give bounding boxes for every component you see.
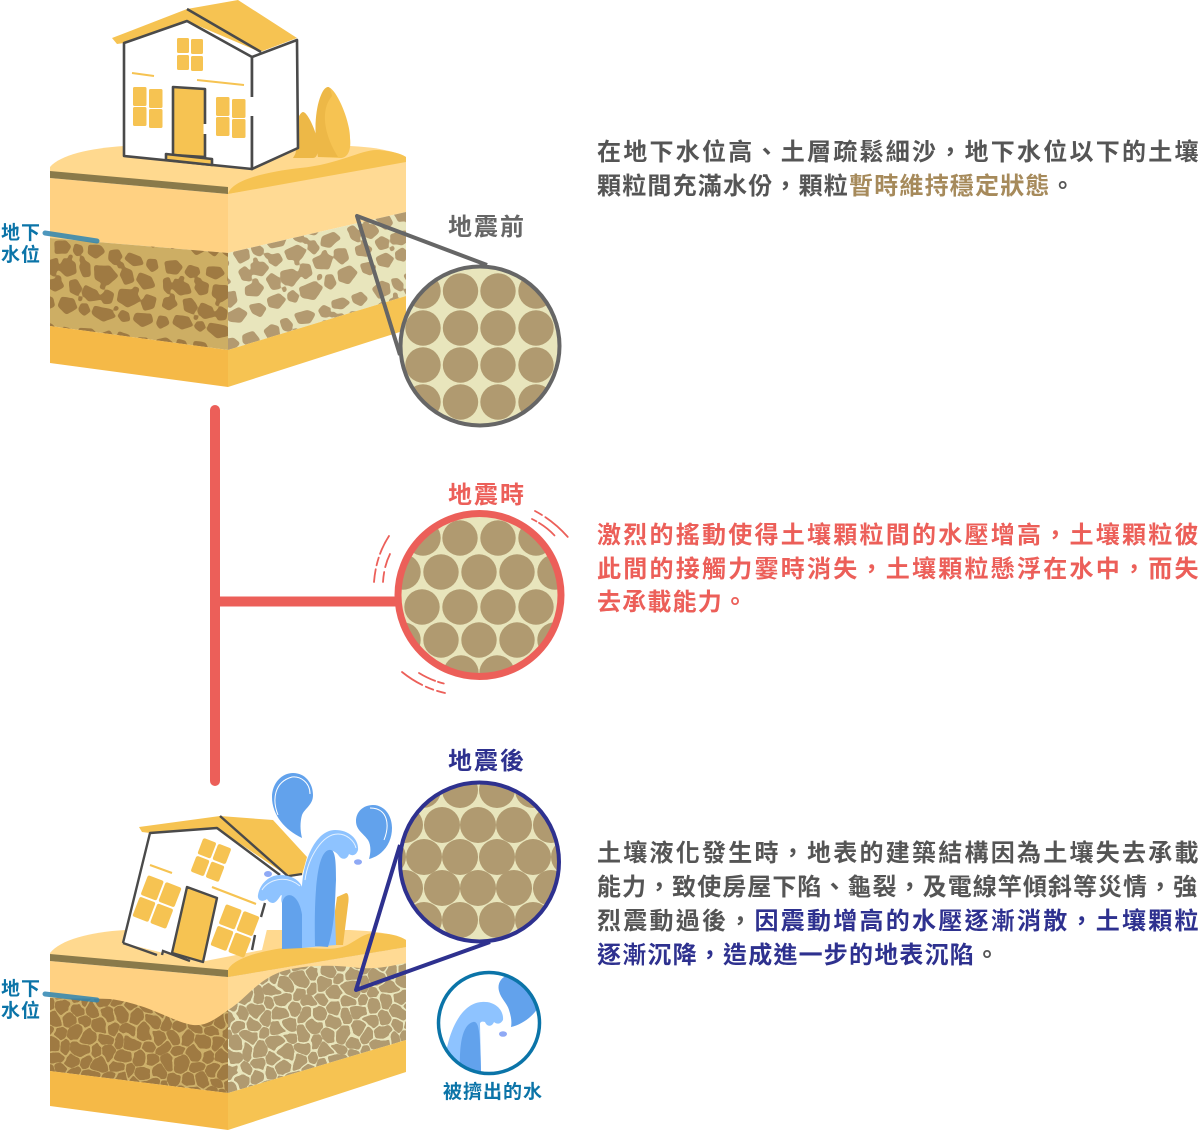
windows: [132, 838, 260, 958]
magnifier: during earthquake: [394, 510, 564, 680]
soil block before earthquake: [50, 146, 406, 387]
text block: before earthquake: 在地下水位高、土層疏鬆細沙，地下水位以下的土壤: [597, 138, 1198, 166]
water level line: [45, 994, 97, 1000]
label: water level: [1, 978, 41, 1022]
ground surface: [50, 146, 406, 194]
text block: after earthquake: 能力，致使房屋下陷、龜裂，及電線竿傾斜等災情，強: [597, 874, 1198, 901]
text block: during earthquake: 去承載能力。: [597, 589, 748, 616]
soil block after earthquake: [50, 930, 406, 1130]
ground surface: [50, 930, 406, 977]
text block: before earthquake: [597, 138, 1198, 200]
windows: [133, 38, 246, 138]
label: water level: 地下: [1, 978, 41, 1000]
icon: water jet: [258, 830, 358, 949]
magnifier: after earthquake: [354, 780, 561, 992]
water level line: [45, 233, 97, 241]
heading: during earthquake: 地震時: [448, 482, 526, 509]
label: water level: 地下: [1, 222, 41, 244]
icon: tilted tree: [330, 893, 349, 945]
text block: after earthquake: [597, 839, 1198, 969]
label: water level: 水位: [1, 243, 41, 266]
label: water level: 水位: [1, 999, 41, 1022]
timeline connector: [215, 410, 400, 781]
ground ribbon: [228, 933, 406, 977]
door: [173, 87, 205, 157]
text block: during earthquake: [597, 521, 1198, 616]
text block: after earthquake: 逐漸沉降，造成進一步的地表沉陷。: [597, 942, 1000, 969]
label: squeezed water: 被擠出的水: [443, 1080, 543, 1103]
text block: after earthquake: 烈震動過後，因震動增高的水壓逐漸消散，土壤顆粒: [597, 907, 1198, 935]
text block: after earthquake: 土壤液化發生時，地表的建築結構因為土壤失去承載: [597, 839, 1198, 867]
icon: trees: [293, 87, 350, 158]
left soil layers: [50, 171, 228, 387]
text block: during earthquake: 此間的接觸力霎時消失，土壤顆粒懸浮在水中，而失: [597, 555, 1198, 583]
left soil layers: [50, 954, 228, 1130]
tilted house: [123, 816, 307, 962]
magnifier: before earthquake: [357, 216, 560, 426]
label: water level: [1, 222, 41, 266]
right soil layers: [228, 947, 406, 1130]
text block: before earthquake: 顆粒間充滿水份，顆粒暫時維持穩定狀態。: [597, 173, 1076, 200]
heading: before earthquake: 地震前: [448, 214, 526, 241]
house before earthquake: [112, 0, 298, 169]
icon: water drops: [264, 773, 392, 877]
text block: during earthquake: 激烈的搖動使得土壤顆粒間的水壓增高，土壤顆粒彼: [597, 521, 1198, 549]
right soil layers: [228, 150, 406, 387]
door: [172, 887, 217, 962]
heading: after earthquake: 地震後: [448, 748, 526, 775]
icon: squeezed water: [438, 972, 542, 1074]
vibration marks: [374, 511, 572, 693]
